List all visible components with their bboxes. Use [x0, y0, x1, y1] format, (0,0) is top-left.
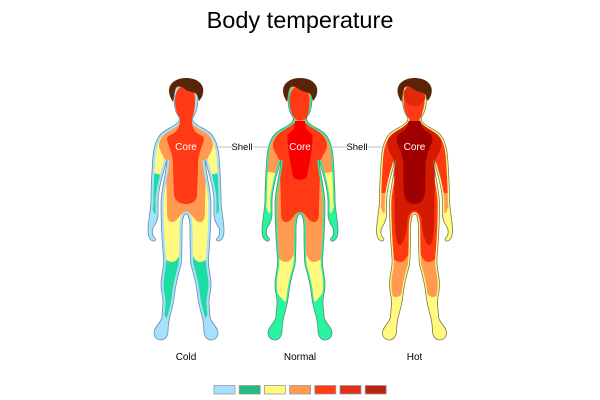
body base: light blue — [150, 210, 222, 338]
bright red core — [288, 121, 312, 180]
head upper dark area — [404, 88, 426, 106]
label: shell left: Shell — [231, 142, 253, 153]
title: Body temperature — [207, 7, 393, 33]
orange head — [177, 86, 196, 107]
label: hot: Hot — [407, 352, 423, 363]
label: cold: Cold — [176, 352, 196, 363]
hair — [283, 78, 317, 102]
label: shell right: Shell — [346, 142, 368, 153]
yellow forearms and shins — [266, 172, 334, 302]
legend — [214, 386, 386, 394]
label: core: Core — [175, 142, 197, 153]
body base: green — [264, 208, 336, 338]
outline — [376, 79, 452, 340]
outline — [262, 79, 338, 340]
hair — [398, 78, 432, 102]
outline — [148, 79, 224, 340]
red shoulders and thighs — [381, 86, 448, 262]
orange shoulders and thighs — [268, 86, 332, 262]
core — [167, 118, 204, 204]
label: core: Core — [404, 142, 426, 153]
red torso — [273, 123, 327, 222]
label: shell right — [330, 142, 385, 153]
hair — [169, 78, 203, 102]
orange forearms and shins — [380, 192, 448, 297]
body base: yellow — [378, 208, 451, 338]
orange torso — [159, 123, 213, 222]
face — [404, 96, 423, 119]
label: normal: Normal — [284, 352, 316, 363]
shell band — [150, 86, 222, 319]
figure: normal — [262, 78, 338, 340]
dark core — [396, 121, 432, 204]
yellow shoulders, torso and thighs — [154, 134, 218, 262]
label: core: Core — [289, 142, 311, 153]
arm and lower leg green zones — [152, 174, 220, 319]
figure: hot — [376, 78, 453, 340]
shell band — [379, 86, 450, 296]
dark red torso and thigh tongues — [388, 122, 442, 245]
label: shell left — [215, 142, 270, 153]
figure: cold — [148, 78, 224, 340]
shell band — [264, 86, 336, 302]
